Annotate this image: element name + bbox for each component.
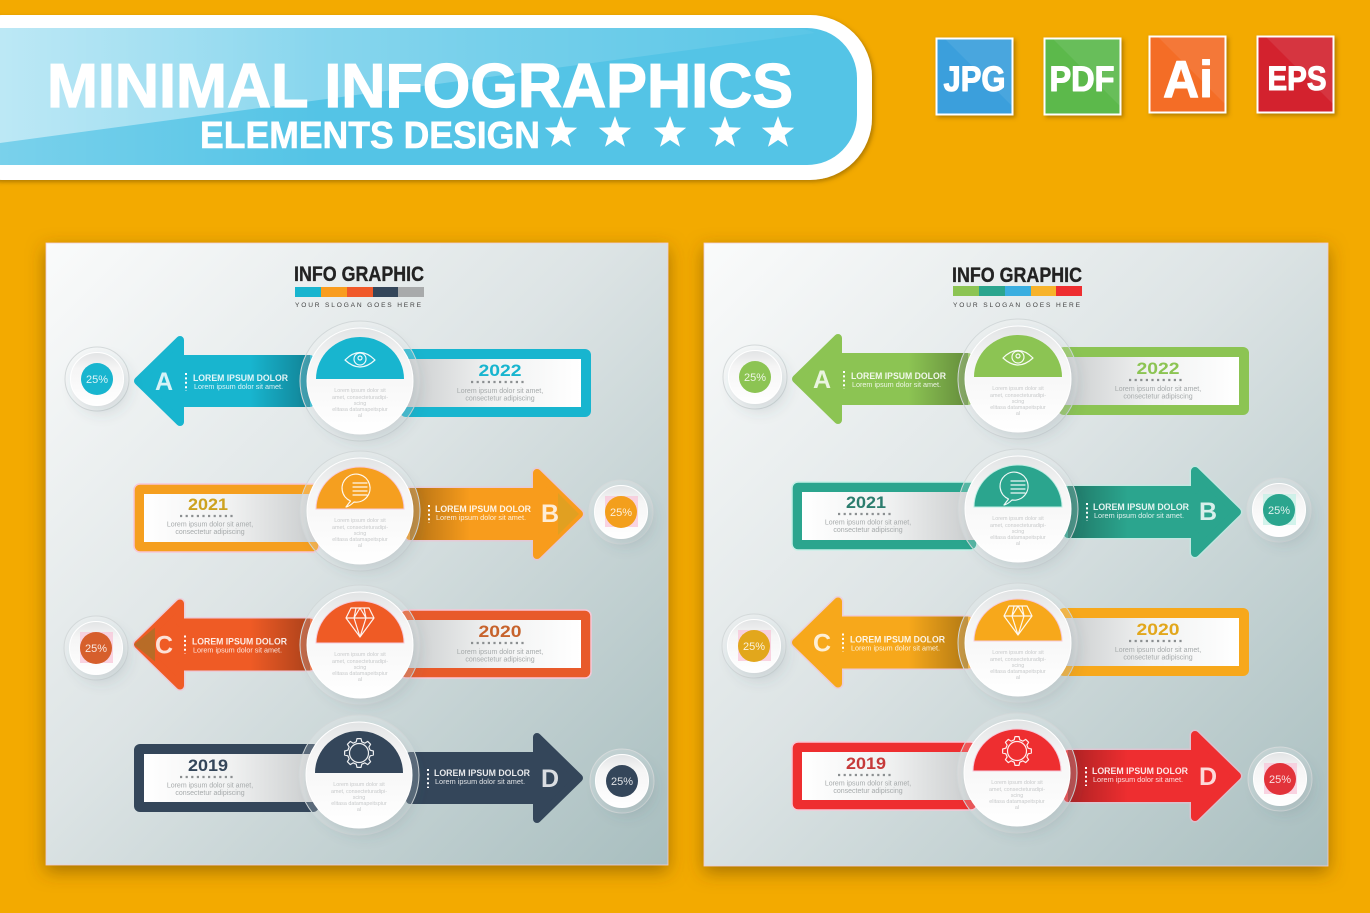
row D: [134, 715, 654, 835]
arrow B: [410, 473, 579, 555]
row B: [792, 449, 1311, 569]
circle D with gear icon: amet, consecteturadipi-: [331, 789, 387, 795]
circle B with chat icon: Lorem ipsum dolor sit: [334, 518, 386, 524]
year box 2019: consectetur adipiscing: [175, 790, 245, 797]
circle D with gear icon: [957, 713, 1077, 833]
year box 2020: consectetur adipiscing: [1123, 654, 1193, 662]
circle A with eye icon: al: [1016, 411, 1020, 417]
heading: INFO GRAPHIC: [294, 263, 424, 286]
circle C with diamond icon: elitasa datamapeitspiur: [332, 671, 388, 677]
arrow D: D: [1199, 763, 1217, 791]
slogan: YOUR SLOGAN GOES HERE: [953, 302, 1081, 309]
circle B with chat icon: amet, consecteturadipi-: [332, 525, 388, 531]
arrow C: Lorem ipsum dolor sit amet.: [193, 646, 282, 654]
circle B with chat icon: al: [1016, 541, 1020, 547]
percent A: 25%: [86, 374, 108, 386]
circle D with gear icon: elitasa datamapeitspiur: [989, 799, 1045, 805]
arrow B: B: [1199, 498, 1217, 526]
year box 2020: 2020: [1136, 620, 1180, 639]
panel: left infographic: [46, 243, 668, 865]
year box 2022: 2022: [1136, 359, 1180, 378]
year box 2019: consectetur adipiscing: [833, 788, 903, 795]
year box 2021: 2021: [188, 495, 228, 514]
circle A with eye icon: Lorem ipsum dolor sit: [992, 386, 1044, 392]
circle A with eye icon: amet, consecteturadipi-: [990, 393, 1046, 399]
year box 2019: [792, 742, 977, 810]
heading: INFO GRAPHIC: [952, 264, 1082, 287]
arrow D: LOREM IPSUM DOLOR: [1092, 766, 1188, 777]
rating stars: [545, 116, 794, 147]
year box 2019: [134, 744, 319, 812]
colour bar: [295, 287, 424, 297]
circle A with eye icon: scing: [354, 401, 366, 407]
arrow C: [796, 602, 968, 684]
banner title: MINIMAL INFOGRAPHICS: [47, 52, 793, 121]
percent D: [590, 749, 654, 813]
circle B with chat icon: al: [358, 543, 362, 549]
circle D with gear icon: al: [1015, 805, 1019, 811]
circle C with diamond icon: scing: [1012, 663, 1024, 669]
year box 2022: Lorem ipsum dolor sit amet,: [1115, 386, 1201, 393]
year box 2021: 2021: [846, 493, 886, 512]
circle A with eye icon: scing: [1012, 399, 1024, 405]
percent A: [723, 345, 787, 409]
slogan: YOUR SLOGAN GOES HERE: [295, 302, 422, 309]
year box 2022: [1058, 347, 1249, 415]
circle C with diamond icon: Lorem ipsum dolor sit: [334, 652, 386, 658]
arrow D: Lorem ipsum dolor sit amet.: [435, 777, 525, 786]
badge: Ai: Ai: [1163, 51, 1213, 109]
percent C: [722, 614, 786, 678]
arrow A: A: [155, 368, 173, 396]
percent A: 25%: [744, 372, 766, 384]
arrow A: A: [813, 366, 831, 394]
year box 2021: Lorem ipsum dolor sit amet,: [167, 522, 253, 528]
banner: [0, 15, 872, 180]
banner subtitle: ELEMENTS DESIGN: [200, 115, 540, 157]
arrow B: LOREM IPSUM DOLOR: [435, 504, 531, 515]
year box 2019: 2019: [188, 756, 228, 775]
circle D with gear icon: al: [357, 807, 361, 813]
year box 2022: consectetur adipiscing: [465, 396, 535, 402]
row D: [792, 713, 1312, 833]
circle A with eye icon: [958, 319, 1078, 439]
year box 2020: [1058, 608, 1249, 676]
percent D: [1248, 747, 1312, 811]
year box 2020: [400, 610, 591, 678]
percent B: [589, 480, 653, 544]
circle C with diamond icon: [300, 585, 420, 705]
percent C: 25%: [85, 643, 107, 655]
row C: [722, 583, 1249, 703]
row C: [64, 585, 591, 705]
arrow C: LOREM IPSUM DOLOR: [192, 636, 287, 648]
badge: JPG: JPG: [944, 60, 1006, 99]
arrow A: LOREM IPSUM DOLOR: [851, 371, 946, 382]
badge: JPG: [936, 38, 1012, 114]
circle A with eye icon: [300, 321, 420, 441]
circle A with eye icon: elitasa datamapeitspiur: [332, 407, 388, 413]
percent A: [65, 347, 129, 411]
arrow C: Lorem ipsum dolor sit amet.: [851, 644, 940, 652]
circle C with diamond icon: elitasa datamapeitspiur: [990, 669, 1046, 675]
circle D with gear icon: Lorem ipsum dolor sit: [333, 782, 385, 788]
year box 2020: Lorem ipsum dolor sit amet,: [1115, 647, 1201, 654]
percent D: 25%: [611, 776, 633, 788]
year box 2021: [792, 482, 977, 550]
year box 2019: Lorem ipsum dolor sit amet,: [167, 782, 253, 790]
circle D with gear icon: amet, consecteturadipi-: [989, 787, 1045, 793]
year box 2022: Lorem ipsum dolor sit amet,: [457, 388, 543, 395]
circle C with diamond icon: scing: [354, 665, 366, 671]
year box 2021: Lorem ipsum dolor sit amet,: [825, 520, 911, 526]
arrow C: [134, 604, 310, 686]
badge: EPS: [1258, 36, 1334, 112]
arrow A: LOREM IPSUM DOLOR: [193, 373, 288, 384]
circle A with eye icon: Lorem ipsum dolor sit: [334, 388, 386, 394]
arrow D: LOREM IPSUM DOLOR: [434, 768, 530, 779]
arrow C: C: [155, 632, 173, 660]
year box 2021: consectetur adipiscing: [833, 527, 903, 534]
badge: PDF: [1044, 38, 1120, 114]
year box 2022: 2022: [478, 361, 522, 380]
circle D with gear icon: [299, 715, 419, 835]
circle C with diamond icon: [958, 583, 1078, 703]
year box 2021: consectetur adipiscing: [175, 529, 245, 536]
circle C with diamond icon: Lorem ipsum dolor sit: [992, 650, 1044, 656]
arrow B: Lorem ipsum dolor sit amet.: [436, 513, 526, 522]
arrow D: [410, 737, 579, 819]
arrow A: Lorem ipsum dolor sit amet.: [194, 382, 283, 391]
arrow D: [1068, 735, 1237, 817]
arrow B: B: [541, 500, 559, 528]
year box 2020: Lorem ipsum dolor sit amet,: [457, 649, 543, 656]
percent C: [64, 616, 128, 680]
circle D with gear icon: elitasa datamapeitspiur: [331, 801, 387, 807]
year box 2022: consectetur adipiscing: [1123, 394, 1193, 400]
arrow D: Lorem ipsum dolor sit amet.: [1093, 775, 1183, 784]
circle B with chat icon: scing: [1012, 529, 1024, 535]
percent B: 25%: [1268, 505, 1290, 517]
arrow B: LOREM IPSUM DOLOR: [1093, 502, 1189, 513]
badge: Ai: [1150, 36, 1226, 112]
circle D with gear icon: Lorem ipsum dolor sit: [991, 780, 1043, 786]
row A: [723, 319, 1249, 439]
year box 2020: 2020: [478, 622, 522, 641]
percent C: 25%: [743, 641, 765, 653]
circle A with eye icon: al: [358, 413, 362, 419]
arrow B: [1068, 471, 1237, 553]
colour bar: [953, 286, 1082, 296]
circle D with gear icon: scing: [353, 795, 365, 801]
circle C with diamond icon: al: [1016, 675, 1020, 681]
circle C with diamond icon: al: [358, 677, 362, 683]
arrow A: [796, 338, 968, 420]
row B: [134, 451, 653, 571]
percent B: [1247, 478, 1311, 542]
year box 2021: [134, 484, 319, 552]
arrow A: [138, 340, 310, 422]
percent B: 25%: [610, 507, 632, 519]
row A: [65, 321, 591, 441]
panel: right infographic: [704, 243, 1328, 866]
arrow B: Lorem ipsum dolor sit amet.: [1094, 511, 1184, 520]
arrow C: C: [813, 630, 831, 658]
year box 2019: 2019: [846, 754, 886, 773]
circle B with chat icon: elitasa datamapeitspiur: [990, 535, 1046, 541]
year box 2019: Lorem ipsum dolor sit amet,: [825, 780, 911, 788]
circle D with gear icon: scing: [1011, 793, 1023, 799]
circle C with diamond icon: amet, consecteturadipi-: [332, 659, 388, 665]
year box 2022: [400, 349, 591, 417]
badge: PDF: PDF: [1050, 60, 1114, 99]
arrow A: Lorem ipsum dolor sit amet.: [852, 380, 941, 389]
circle A with eye icon: amet, consecteturadipi-: [332, 395, 388, 401]
circle B with chat icon: Lorem ipsum dolor sit: [992, 516, 1044, 522]
badge: EPS: EPS: [1268, 60, 1326, 98]
circle A with eye icon: elitasa datamapeitspiur: [990, 405, 1046, 411]
circle B with chat icon: [958, 449, 1078, 569]
circle B with chat icon: amet, consecteturadipi-: [990, 523, 1046, 529]
circle B with chat icon: [300, 451, 420, 571]
circle B with chat icon: scing: [354, 531, 366, 537]
arrow C: LOREM IPSUM DOLOR: [850, 634, 945, 646]
circle B with chat icon: elitasa datamapeitspiur: [332, 537, 388, 543]
percent D: 25%: [1269, 774, 1291, 786]
year box 2020: consectetur adipiscing: [465, 656, 535, 664]
arrow D: D: [541, 765, 559, 793]
circle C with diamond icon: amet, consecteturadipi-: [990, 657, 1046, 663]
